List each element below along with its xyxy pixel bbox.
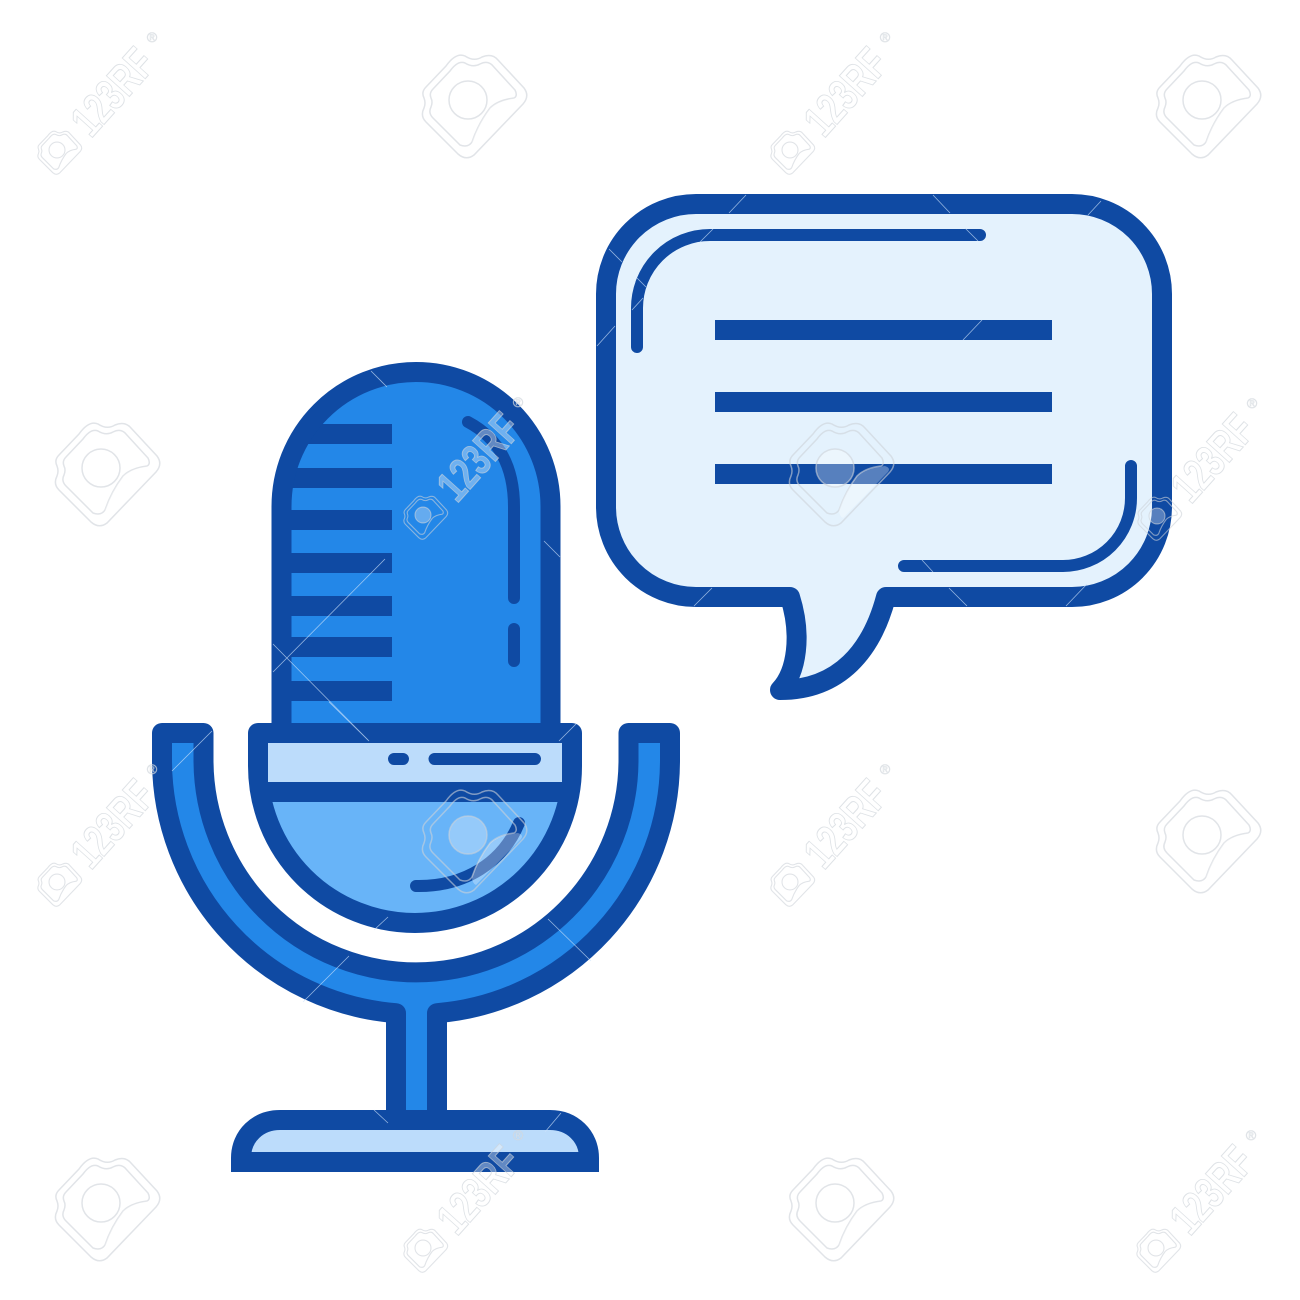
head highlight [468, 422, 514, 661]
microphone head [282, 372, 550, 732]
watermark egg 2 [1156, 55, 1261, 158]
thin diagonal watermark lines [172, 195, 1101, 1132]
head outline [282, 372, 550, 732]
watermark logo 3 [404, 394, 531, 539]
watermark logo 1: ® [147, 29, 158, 45]
bowl highlight [416, 823, 519, 886]
watermark logo 8 [1137, 1127, 1264, 1272]
stand base [241, 1120, 589, 1162]
collar marks [394, 753, 535, 765]
watermark logo 7: ® [513, 1127, 524, 1143]
microphone collar and bowl [258, 733, 572, 923]
watermark egg 7 [55, 1158, 160, 1261]
microphone stand [162, 733, 670, 1162]
watermark logo 7 [404, 1127, 531, 1272]
watermark logo 6: 123RF [794, 770, 898, 878]
watermark egg 4 [789, 423, 894, 526]
watermark logo 7: 123RF [427, 1136, 531, 1244]
speech bubble [606, 204, 1162, 690]
watermark logo 4 [1138, 395, 1265, 540]
watermark logo 2 [771, 29, 898, 174]
watermark logo 2: 123RF [794, 38, 898, 146]
watermark logo 3: 123RF [427, 403, 531, 511]
watermark egg 1 [422, 55, 527, 158]
collar divider [258, 782, 572, 802]
collar band [268, 743, 562, 782]
watermark logo 8: ® [1246, 1127, 1257, 1143]
bubble text lines [715, 320, 1052, 484]
bubble highlight bottom [904, 466, 1131, 566]
watermark logo 1 [38, 29, 165, 174]
watermark logo 1: 123RF [61, 38, 165, 146]
watermark logo 8: 123RF [1160, 1136, 1264, 1244]
bubble highlight top [637, 235, 980, 347]
watermark logo 2: ® [880, 29, 891, 45]
watermark logo 4: ® [1247, 395, 1258, 411]
watermark egg 3 [55, 423, 160, 526]
watermark logo 5 [38, 761, 165, 906]
watermark logo 4: 123RF [1161, 404, 1265, 512]
watermark logo 6 [771, 761, 898, 906]
watermark logo 5: ® [147, 761, 158, 777]
grille lines [285, 424, 392, 701]
watermark logo 6: ® [880, 761, 891, 777]
watermark egg 6 [1156, 790, 1261, 893]
watermark egg 8 [789, 1158, 894, 1261]
watermark logo 5: 123RF [61, 770, 165, 878]
watermark logo 3: ® [513, 394, 524, 410]
watermark egg 5 [422, 790, 527, 893]
